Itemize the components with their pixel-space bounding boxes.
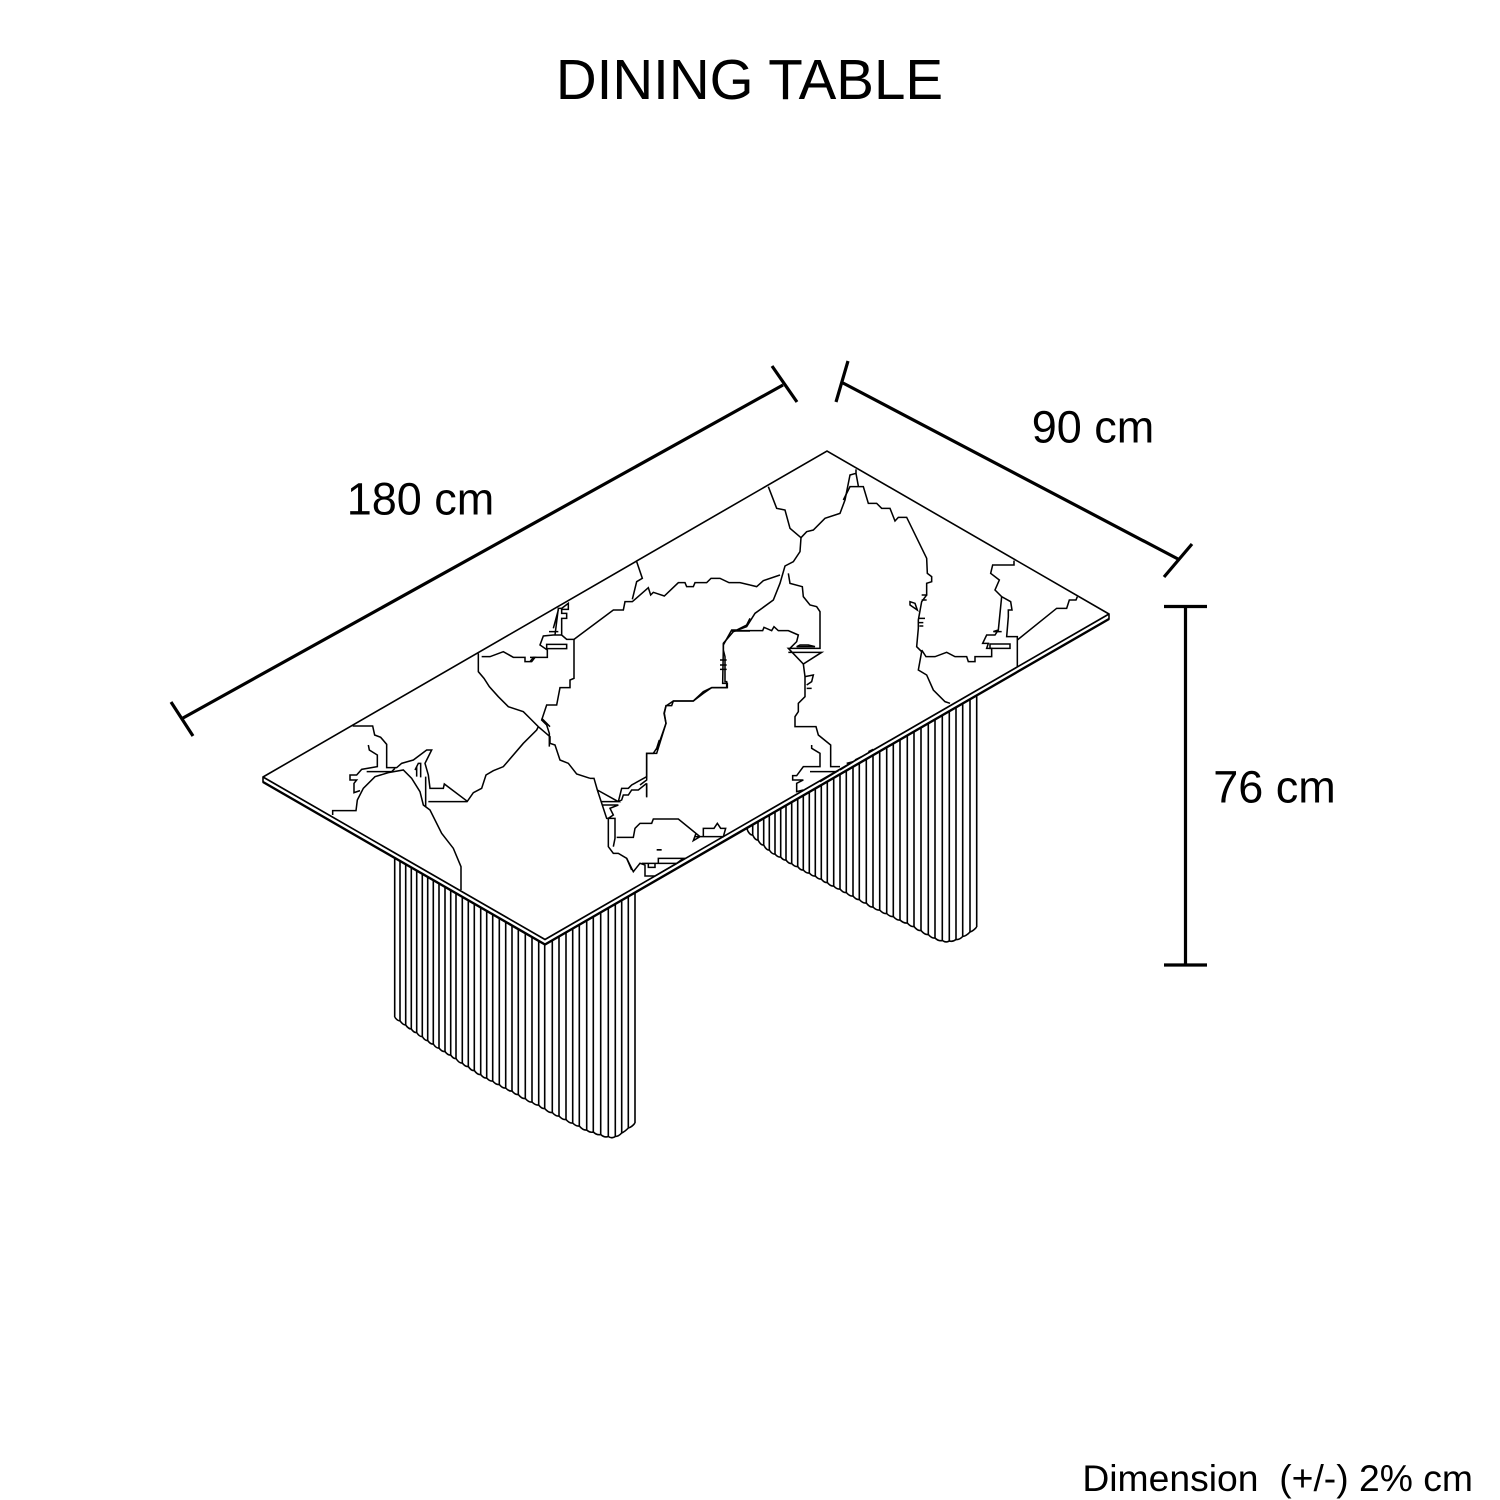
right fluted pedestal leg [747, 680, 977, 942]
dimension line: 76 cm height [1164, 606, 1336, 965]
dimension line: 90 cm width: 90 cm [1032, 402, 1154, 452]
title: DINING TABLE [556, 48, 943, 111]
dimension line: 76 cm height: 76 cm [1213, 762, 1336, 812]
dimension line: 90 cm width [836, 361, 1192, 577]
tolerance note: Dimension (+/-) 2% cm [1082, 1457, 1473, 1499]
dimension line: 180 cm length [171, 366, 797, 736]
table top with edge thickness [263, 451, 1109, 944]
dimension line: 180 cm length: 180 cm [347, 474, 494, 524]
left fluted pedestal leg [395, 850, 635, 1138]
marble veins on table top [333, 469, 1077, 890]
